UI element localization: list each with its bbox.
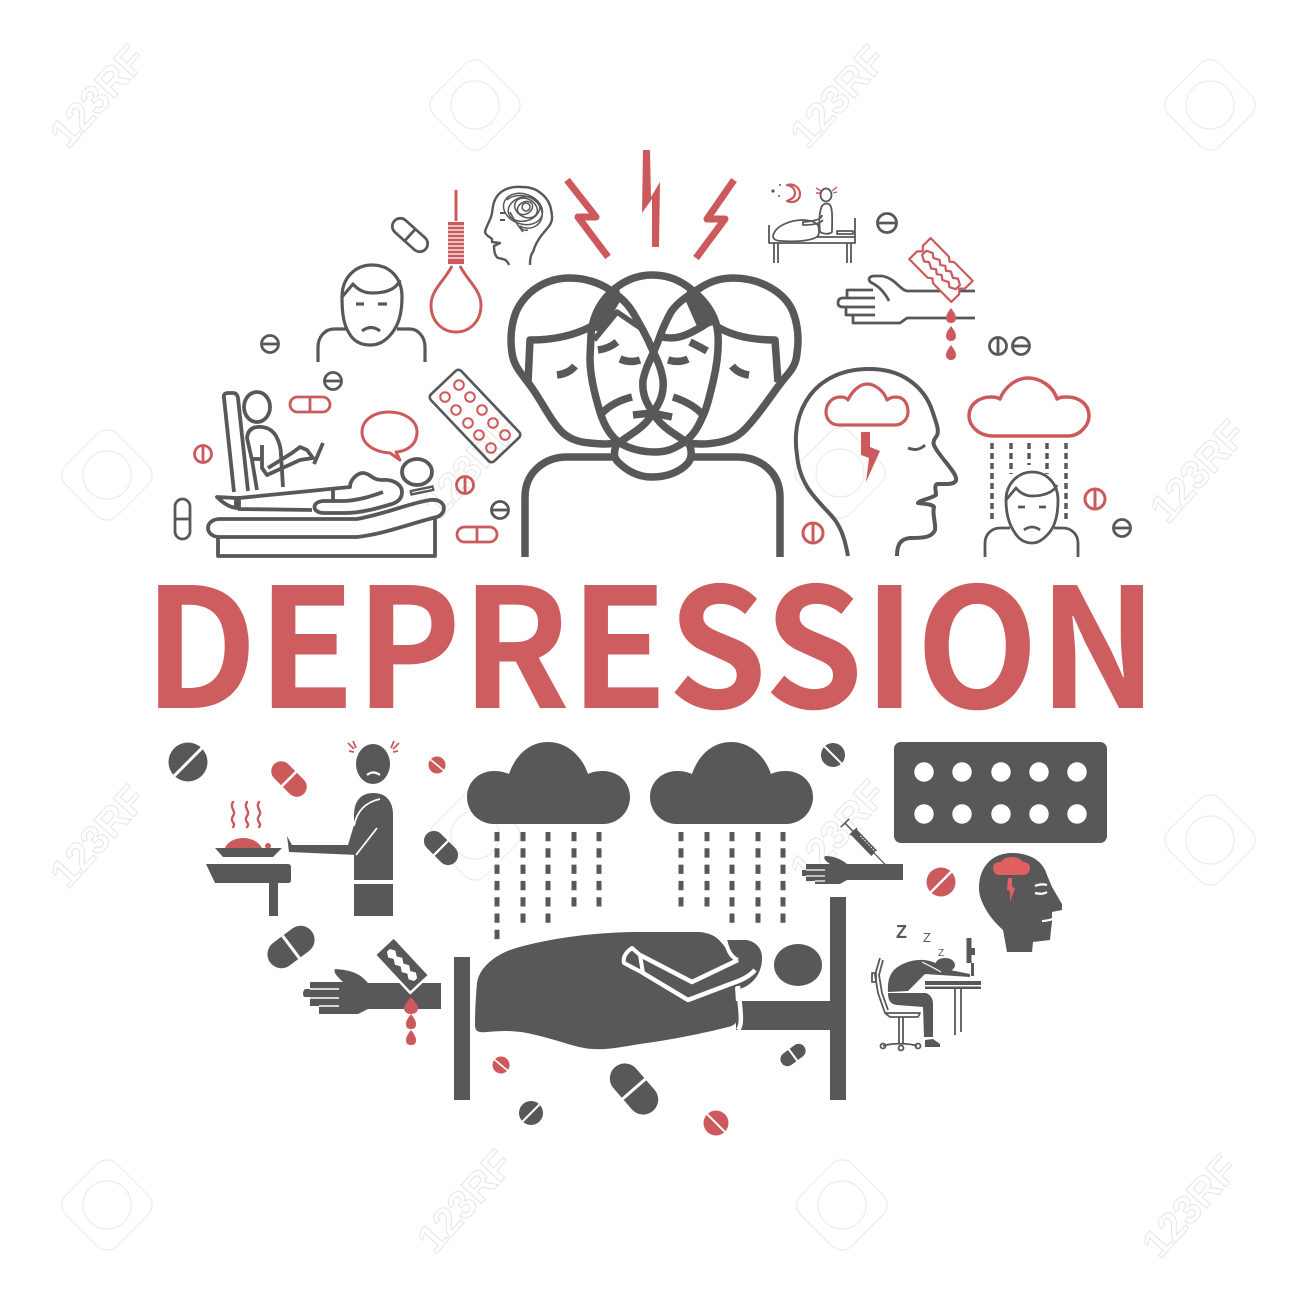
- icon: solid head with storm cloud: [979, 853, 1062, 952]
- icon: person asleep at desk: [872, 922, 981, 1050]
- icon: outline arm with razor blade: [838, 238, 975, 360]
- watermarks: 123RF: [42, 777, 155, 896]
- icon: arm with syringe: [802, 819, 903, 884]
- watermarks: 123RF: [1134, 1147, 1247, 1266]
- watermarks: 123RF: [409, 1142, 522, 1261]
- icon: solid blister pack: [894, 742, 1107, 843]
- icon: solid arm with razor blade: [303, 937, 441, 1045]
- icon: outline blister pack: [428, 368, 522, 464]
- watermarks: 123RF: [414, 407, 527, 526]
- icon: insomnia in bed: [769, 184, 855, 263]
- icon: therapist with patient on couch: [208, 392, 444, 556]
- icon: person asleep at desk: Z: [896, 922, 907, 942]
- title: DEPRESSION: [144, 515, 1158, 756]
- icon: person refusing food: [206, 741, 399, 916]
- icon: man under rain cloud: [969, 378, 1089, 557]
- icon: noose: [431, 190, 481, 332]
- watermarks: 123RF: [782, 37, 895, 156]
- icon: person lying in bed: [454, 897, 846, 1100]
- icon: head with tangled brain: [485, 187, 552, 265]
- icon: person asleep at desk: Z: [938, 948, 944, 959]
- pills: solid scattered: [160, 734, 962, 1141]
- watermarks: 123RF: [1142, 412, 1255, 531]
- watermarks: 123RF: [782, 772, 895, 891]
- icon: solid rain clouds: [467, 742, 813, 944]
- icon: three overlapping sad faces: [511, 275, 798, 557]
- icon: lightning bolts: [567, 150, 734, 258]
- pills: outline scattered: [175, 214, 1130, 543]
- icon: person asleep at desk: Z: [923, 930, 931, 945]
- icon: head profile with storm cloud: [796, 369, 956, 556]
- icon: sad man: [318, 265, 425, 362]
- watermarks: 123RF: [42, 37, 155, 156]
